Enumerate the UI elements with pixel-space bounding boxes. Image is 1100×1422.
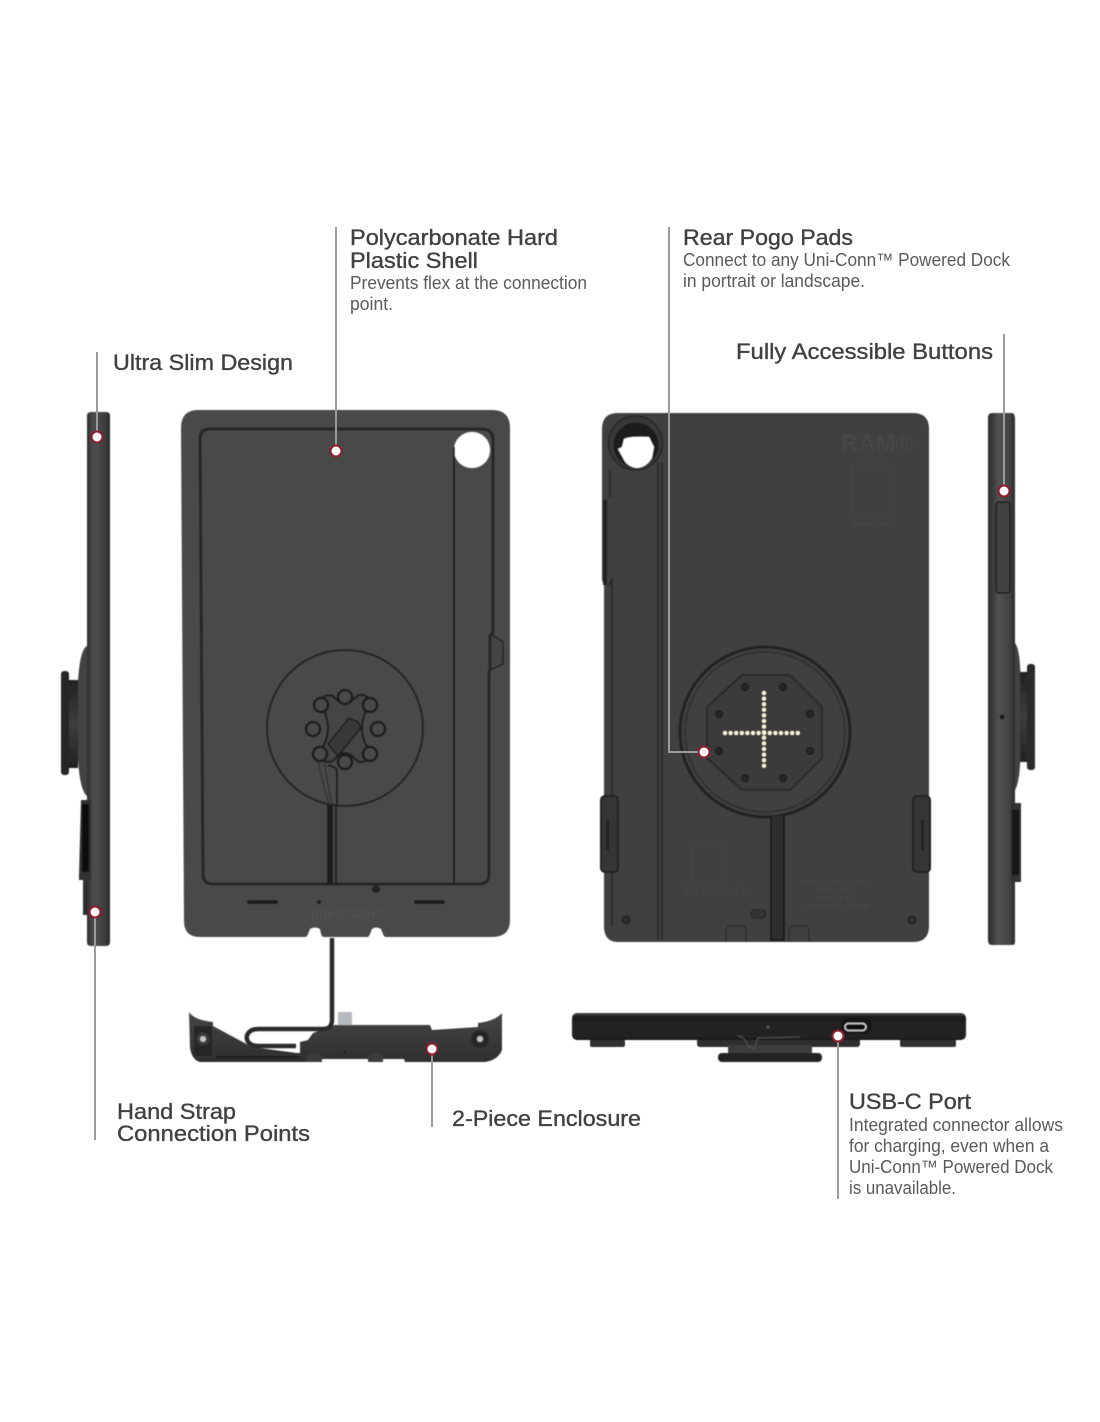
- housing hole: [344, 1051, 346, 1053]
- mount neck: [68, 680, 78, 768]
- callout: ultra slim design: Ultra Slim Design: [113, 350, 293, 375]
- side body: [988, 413, 1015, 945]
- mount circle: [267, 650, 423, 806]
- camera opening: [618, 437, 654, 468]
- embossed legal text: PATS PEND: [816, 896, 854, 903]
- edge body: [572, 1013, 966, 1040]
- callout: rear pogo pads: [669, 225, 1011, 758]
- camera ring: [608, 416, 662, 470]
- mount neck: [1020, 672, 1028, 762]
- mount base: [1015, 643, 1021, 790]
- side hole: [1000, 714, 1004, 720]
- embossed legal text: PATENTED: [817, 888, 853, 895]
- mount screws: [306, 690, 385, 769]
- callout: USB-C port: Uni-Conn™ Powered Dock: [849, 1157, 1054, 1177]
- callout: hand strap points: Connection Points: [117, 1121, 310, 1146]
- callout: USB-C port: Integrated connector allows: [849, 1115, 1063, 1135]
- V notch: [738, 1036, 800, 1049]
- cable channel: [771, 816, 784, 940]
- embossed logo: IntelliSkin®: [310, 906, 386, 923]
- callout: polycarbonate shell: [330, 225, 587, 456]
- shell outline: [602, 413, 929, 942]
- embossed IntelliSkin logo: [851, 464, 897, 529]
- mount knob: [718, 1053, 822, 1062]
- strap connection: [79, 800, 91, 880]
- right bracket and screw: [471, 1030, 489, 1048]
- mount spider plate: [320, 695, 370, 762]
- mount knob: [1027, 664, 1035, 770]
- strap feet: [590, 1039, 625, 1047]
- plate screws: [716, 684, 814, 782]
- right rail line: [453, 447, 455, 884]
- callout: USB-C port: USB-C Port: [849, 1089, 971, 1114]
- left rail: [658, 462, 662, 940]
- callout: rear pogo pads: in portrait or landscape.: [683, 271, 865, 291]
- panel: right side view of case: [988, 413, 1035, 945]
- callout: rear pogo pads: Rear Pogo Pads: [683, 225, 853, 250]
- left bracket and screw: [194, 1026, 212, 1056]
- bottom notches: [726, 926, 809, 942]
- rear plate: [697, 1038, 860, 1047]
- camera cut-out: [454, 432, 490, 468]
- embossed legal text: MADE IN USA & ASIA: [800, 880, 870, 887]
- lower step: [83, 880, 88, 915]
- embossed GDS logo: GDS®Tech: [684, 883, 750, 898]
- callout: accessible buttons: [736, 334, 1010, 496]
- cable and strap loop: [247, 938, 332, 1046]
- mount ring: [680, 647, 850, 817]
- lower groove: [216, 1056, 300, 1058]
- internal cable channel: [328, 765, 337, 806]
- base bumps: [307, 1052, 383, 1062]
- callout: two-piece enclosure: 2-Piece Enclosure: [452, 1106, 641, 1131]
- tab recess: [490, 633, 503, 670]
- callout: USB-C port: [832, 1030, 1063, 1199]
- callout: polycarbonate shell: Prevents flex at the connection: [350, 273, 587, 293]
- callout: hand strap points: [90, 906, 310, 1146]
- callout: polycarbonate shell: Polycarbonate Hard: [350, 225, 558, 250]
- embossed GDS logo: [684, 846, 750, 898]
- callout: ultra slim design: [92, 350, 293, 442]
- USB-C surround: [841, 1018, 872, 1034]
- strap mounts: [601, 796, 930, 872]
- enclosure left body: [189, 1012, 320, 1062]
- mount base: [77, 646, 87, 796]
- microphone holes: [317, 900, 321, 904]
- embossed legal text: RAMMOUNT.COM/IP: [801, 904, 869, 911]
- callout: polycarbonate shell: Plastic Shell: [350, 248, 478, 273]
- callout: two-piece enclosure: [426, 1044, 641, 1131]
- callout: USB-C port: is unavailable.: [849, 1178, 956, 1198]
- panel: left side view of case: [61, 412, 110, 946]
- panel: front interior of case: [181, 410, 510, 937]
- panel: bottom edge of case: [572, 1013, 966, 1062]
- octagon plate: [707, 675, 822, 790]
- pogo pads: [725, 693, 803, 771]
- USB-C plug: [338, 1012, 352, 1025]
- strap connection: [1011, 803, 1021, 882]
- USB-C port: [845, 1024, 866, 1030]
- embossed IntelliSkin logo: IntelliSkin®: [851, 519, 897, 529]
- button pair: [996, 502, 1010, 593]
- interior recess: [200, 429, 493, 884]
- speaker slots: [247, 900, 278, 904]
- mount neck: [728, 1045, 812, 1055]
- internal connector: [328, 718, 361, 756]
- callout: polycarbonate shell: point.: [350, 294, 393, 314]
- side body: [87, 412, 110, 946]
- mount knob: [61, 671, 69, 775]
- enclosure centre block: [300, 1013, 502, 1062]
- panel: rear of case: [601, 413, 930, 942]
- callout: accessible buttons: Fully Accessible Buttons: [736, 339, 993, 364]
- corner screws: [622, 916, 630, 924]
- panel: lower enclosure piece: [189, 938, 502, 1062]
- lower slot: [751, 910, 766, 918]
- embossed RAM logo: RAM®: [841, 430, 913, 457]
- callout: USB-C port: for charging, even when a: [849, 1136, 1050, 1156]
- microphone hole: [767, 1026, 769, 1028]
- shell outline: [181, 410, 510, 937]
- side button slot: [603, 500, 607, 585]
- callout: hand strap points: Hand Strap: [117, 1099, 236, 1124]
- callout: rear pogo pads: Connect to any Uni-Conn™ Powered Dock: [683, 250, 1011, 270]
